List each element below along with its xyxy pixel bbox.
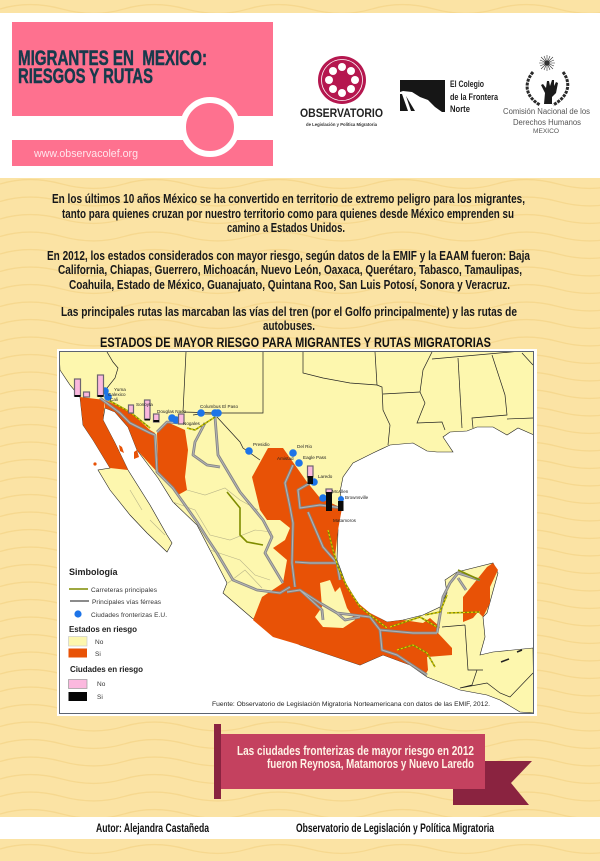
logo: Observatorio: de Legislación y Política Migratoria <box>306 122 377 127</box>
callout ribbon: Las ciudades fronterizas de mayor riesgo en 2012 <box>237 743 474 758</box>
logo: El Colegio de la Frontera Norte: de la Frontera <box>450 92 499 103</box>
footer band: Autor: Alejandra Castañeda <box>96 821 209 835</box>
city labels: Calexico <box>108 392 126 397</box>
logo: Observatorio: OBSERVATORIO <box>300 106 383 120</box>
title block <box>12 22 273 166</box>
logo: Observatorio <box>300 56 383 127</box>
railways <box>100 398 480 675</box>
logo: El Colegio de la Frontera Norte: El Colegio <box>450 79 484 90</box>
map legend: No <box>97 681 106 688</box>
footer band: Observatorio de Legislación y Política Migratoria <box>296 821 494 835</box>
city labels: Laredo <box>318 474 333 479</box>
map legend: Ciudades fronterizas E.U. <box>91 612 167 619</box>
map legend: Si <box>95 651 101 658</box>
city labels: Eagle Pass <box>303 455 327 460</box>
map legend: Carreteras principales <box>91 587 158 594</box>
city labels: Presidio <box>253 442 270 447</box>
city labels: Cali <box>110 397 118 402</box>
mexican state borders <box>130 488 272 588</box>
intro text block: camino a Estados Unidos. <box>227 221 345 235</box>
title block: MIGRANTES EN MEXICO: <box>18 47 207 70</box>
map legend: Ciudades en riesgo <box>70 665 143 674</box>
website: www.observacolef.org <box>33 148 138 160</box>
map legend: Principales vías férreas <box>92 599 162 606</box>
non-risk holes <box>315 580 355 628</box>
city labels: Sonoyta <box>136 402 153 407</box>
logo: CNDH <box>503 55 590 135</box>
map panel <box>57 349 537 716</box>
logo: CNDH: MEXICO <box>533 129 559 135</box>
city labels: Columbus El Paso <box>200 404 238 409</box>
logo: CNDH: Derechos Humanos <box>513 118 581 127</box>
city risk bars <box>74 375 332 493</box>
map legend: Si <box>97 694 103 701</box>
footer band <box>0 817 600 839</box>
city labels: Matamoros <box>333 518 357 523</box>
map legend: No <box>95 639 104 646</box>
states at risk <box>80 397 498 675</box>
logo: CNDH: Comisión Nacional de los <box>503 107 590 116</box>
map legend <box>68 567 167 701</box>
city labels: Yuma <box>114 387 126 392</box>
us state borders <box>107 350 533 697</box>
land base <box>59 351 534 713</box>
map source: Fuente: Observatorio de Legislación Migratoria Norteamericana con datos de las EMIF, 2012. <box>212 701 490 708</box>
map heading: ESTADOS DE MAYOR RIESGO PARA MIGRANTES Y RUTAS MIGRATORIAS <box>100 334 491 350</box>
city labels <box>108 387 369 523</box>
highways <box>108 400 480 667</box>
city labels: Douglas Naco <box>157 409 186 414</box>
city labels: Brownsville <box>345 495 369 500</box>
blue border-city dots <box>101 387 344 502</box>
logo: El Colegio de la Frontera Norte: Norte <box>450 104 470 115</box>
city labels: Del Rio <box>297 444 313 449</box>
title block: RIESGOS Y RUTAS <box>18 65 153 88</box>
railway highlight <box>100 398 480 675</box>
header panel <box>0 13 600 178</box>
city labels: Nogales <box>183 421 201 426</box>
callout ribbon: fueron Reynosa, Matamoros y Nuevo Laredo <box>267 756 474 771</box>
city labels: Amistad <box>277 456 294 461</box>
logo: El Colegio de la Frontera Norte <box>400 79 499 115</box>
map legend: Simbología <box>69 567 118 577</box>
decorative circle <box>183 100 237 154</box>
intro text block: autobuses. <box>263 319 315 333</box>
callout ribbon <box>214 724 532 805</box>
city labels: McAllen <box>332 489 349 494</box>
map legend: Estados en riesgo <box>69 625 137 634</box>
intro text block <box>47 192 531 333</box>
